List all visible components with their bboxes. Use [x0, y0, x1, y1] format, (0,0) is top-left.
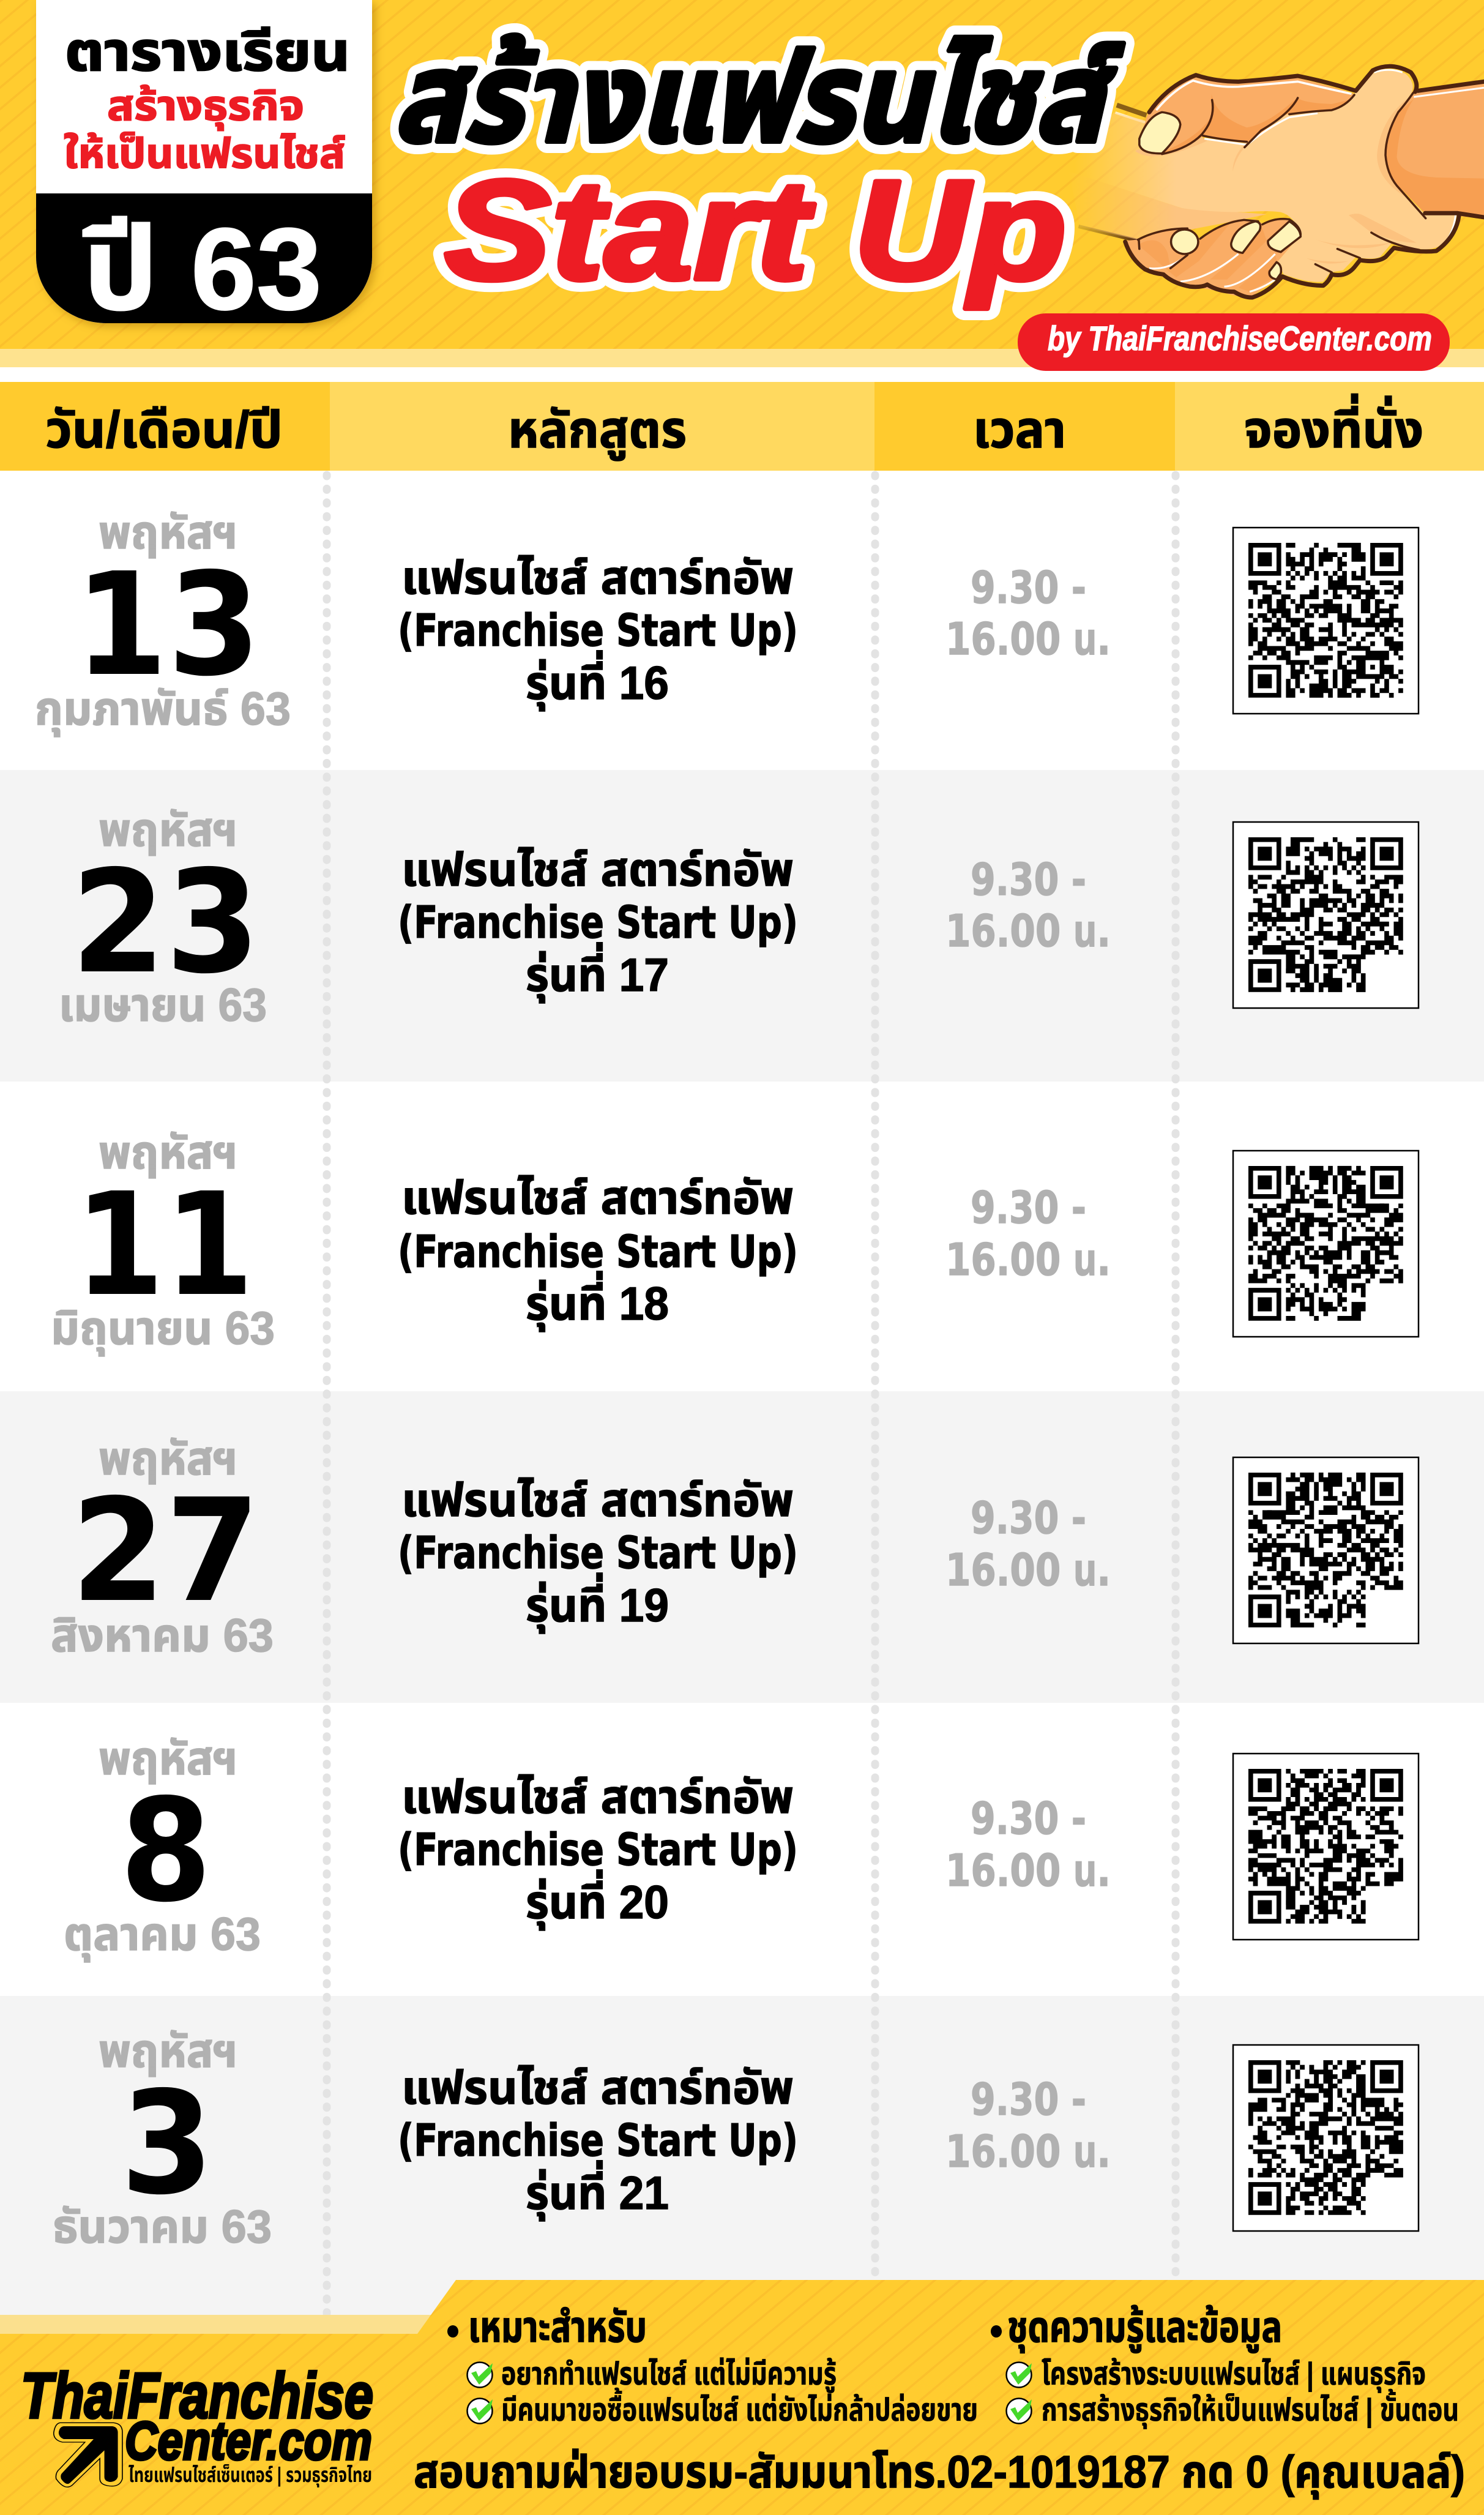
row 4 course: (Franchise Start Up) [398, 1527, 798, 1579]
row 5 course [398, 1771, 798, 1930]
row 4 course [398, 1474, 798, 1634]
row 4 date [51, 1433, 274, 1662]
row 1 course [398, 552, 798, 711]
row 4 date: พฤหัสฯ [99, 1433, 237, 1485]
row 1 date: พฤหัสฯ [99, 507, 237, 559]
table header [0, 382, 1484, 471]
row 6 date [53, 2025, 272, 2253]
footer panel [0, 2280, 1484, 2515]
row 2 time: 16.00 น. [945, 905, 1111, 957]
row 6 course: รุ่นที่ 21 [526, 2161, 669, 2221]
icon: handshake [1068, 66, 1484, 298]
badge: schedule year 63 [36, 0, 372, 334]
header banner [0, 0, 1484, 367]
row 1 time [945, 562, 1111, 665]
logo arrow [54, 2423, 122, 2487]
row 5 course: (Franchise Start Up) [398, 1824, 798, 1875]
row 6 time [945, 2074, 1111, 2177]
row 3 date [51, 1127, 275, 1356]
logo: ThaiFranchise [21, 2360, 373, 2432]
title line 1: สร้างแฟรนไชส์ [393, 28, 1124, 168]
row 3 QR code [1233, 1151, 1419, 1337]
row 5 QR code [1233, 1754, 1419, 1940]
row 6 date: ธันวาคม 63 [53, 2201, 272, 2253]
row 2 course [398, 844, 798, 1003]
row 4 [0, 1391, 1484, 1703]
logo: ไทยแฟรนไชส์เซ็นเตอร์ | รวมธุรกิจไทย [129, 2464, 372, 2487]
row 1 date [35, 507, 291, 737]
row 6 time: 16.00 น. [945, 2126, 1111, 2177]
row 4 course: แฟรนไชส์ สตาร์ทอัพ [401, 1474, 794, 1527]
badge heading: ตารางเรียน [65, 21, 350, 82]
row 2 course: (Franchise Start Up) [398, 897, 798, 948]
header: date: วัน/เดือน/ปี [45, 401, 283, 458]
row 5 date: 8 [120, 1768, 212, 1934]
row 4 date: 27 [71, 1468, 260, 1634]
header: booking: จองที่นั่ง [1244, 394, 1423, 458]
row 5 time: 9.30 - [971, 1793, 1086, 1844]
row 5 date [64, 1733, 261, 1962]
row 6 [0, 1996, 1484, 2317]
row 3 date: มิถุนายน 63 [51, 1302, 275, 1356]
row 4 date: สิงหาคม 63 [51, 1610, 274, 1662]
row 5 [0, 1703, 1484, 1996]
title line 2: Start Up [444, 151, 1067, 310]
row 1 QR code [1233, 528, 1419, 714]
row 6 date: พฤหัสฯ [99, 2025, 237, 2077]
row 2 date: เมษายน 63 [59, 979, 267, 1031]
row 5 date: ตุลาคม 63 [64, 1908, 261, 1962]
row 4 course: รุ่นที่ 19 [526, 1573, 669, 1634]
row 2 time [945, 854, 1111, 957]
row 3 time: 9.30 - [971, 1182, 1086, 1233]
row 3 course: รุ่นที่ 18 [526, 1271, 669, 1332]
checklist item 1: อยากทำแฟรนไชส์ แต่ไม่มีความรู้ [501, 2356, 837, 2393]
row 2 date [59, 804, 267, 1031]
row 3 course [398, 1172, 798, 1332]
row 2 date: 23 [71, 840, 260, 1005]
row 5 course: รุ่นที่ 20 [526, 1870, 669, 1930]
row 2 date: พฤหัสฯ [99, 804, 237, 856]
row 6 course: แฟรนไชส์ สตาร์ทอัพ [401, 2062, 794, 2114]
row 3 course: แฟรนไชส์ สตาร์ทอัพ [401, 1172, 794, 1224]
row 4 time: 16.00 น. [945, 1544, 1111, 1596]
row 1 [0, 471, 1484, 770]
row 2 time: 9.30 - [971, 854, 1086, 905]
row 6 time: 9.30 - [971, 2074, 1086, 2125]
badge year: ปี 63 [83, 204, 322, 334]
checklist item 2 [468, 2388, 978, 2428]
footer heading: knowledge set: ชุดความรู้และข้อมูล [1007, 2303, 1282, 2353]
logo: Center.com [125, 2410, 372, 2471]
row 1 date: 13 [75, 542, 261, 708]
row 4 time: 9.30 - [971, 1492, 1086, 1544]
header: time: เวลา [973, 401, 1066, 458]
footer heading: suitable for: เหมาะสำหรับ [468, 2303, 647, 2351]
badge red line 2: ให้เป็นแฟรนไชส์ [64, 130, 345, 177]
row 3 time [945, 1182, 1111, 1285]
row 2 course: รุ่นที่ 17 [526, 943, 669, 1003]
row 1 course: รุ่นที่ 16 [526, 651, 669, 711]
badge red line 1: สร้างธุรกิจ [107, 83, 304, 131]
row 6 date: 3 [121, 2061, 214, 2226]
row 5 date: พฤหัสฯ [99, 1733, 237, 1785]
row 6 QR code [1233, 2045, 1419, 2231]
row 2 course: แฟรนไชส์ สตาร์ทอัพ [401, 844, 794, 896]
row 1 date: กุมภาพันธ์ 63 [35, 683, 291, 737]
row 3 [0, 1082, 1484, 1391]
row 1 course: แฟรนไชส์ สตาร์ทอัพ [401, 552, 794, 604]
row 3 date: 11 [75, 1162, 254, 1328]
title line 2: Start Up [444, 151, 1067, 310]
row 2 [0, 770, 1484, 1082]
row 3 course: (Franchise Start Up) [398, 1226, 798, 1277]
row 2 QR code [1233, 822, 1419, 1008]
row 5 time [945, 1793, 1111, 1896]
row 3 date: พฤหัสฯ [99, 1127, 237, 1179]
row 6 course: (Franchise Start Up) [398, 2115, 798, 2166]
row 5 time: 16.00 น. [945, 1845, 1111, 1896]
row 4 time [945, 1492, 1111, 1596]
checklist item 2: มีคนมาขอซื้อแฟรนไชส์ แต่ยังไม่กล้าปล่อยขาย [501, 2388, 978, 2428]
row 6 course [398, 2062, 798, 2221]
row 1 time: 9.30 - [971, 562, 1086, 613]
header: course: หลักสูตร [508, 401, 687, 461]
row 3 time: 16.00 น. [945, 1234, 1111, 1285]
row 5 course: แฟรนไชส์ สตาร์ทอัพ [401, 1771, 794, 1823]
title line 1: สร้างแฟรนไชส์ [393, 28, 1124, 168]
row 1 time: 16.00 น. [945, 613, 1111, 665]
row 4 QR code [1233, 1457, 1419, 1643]
logo [21, 2360, 373, 2487]
row 1 course: (Franchise Start Up) [398, 605, 798, 656]
byline pill [1018, 313, 1450, 371]
